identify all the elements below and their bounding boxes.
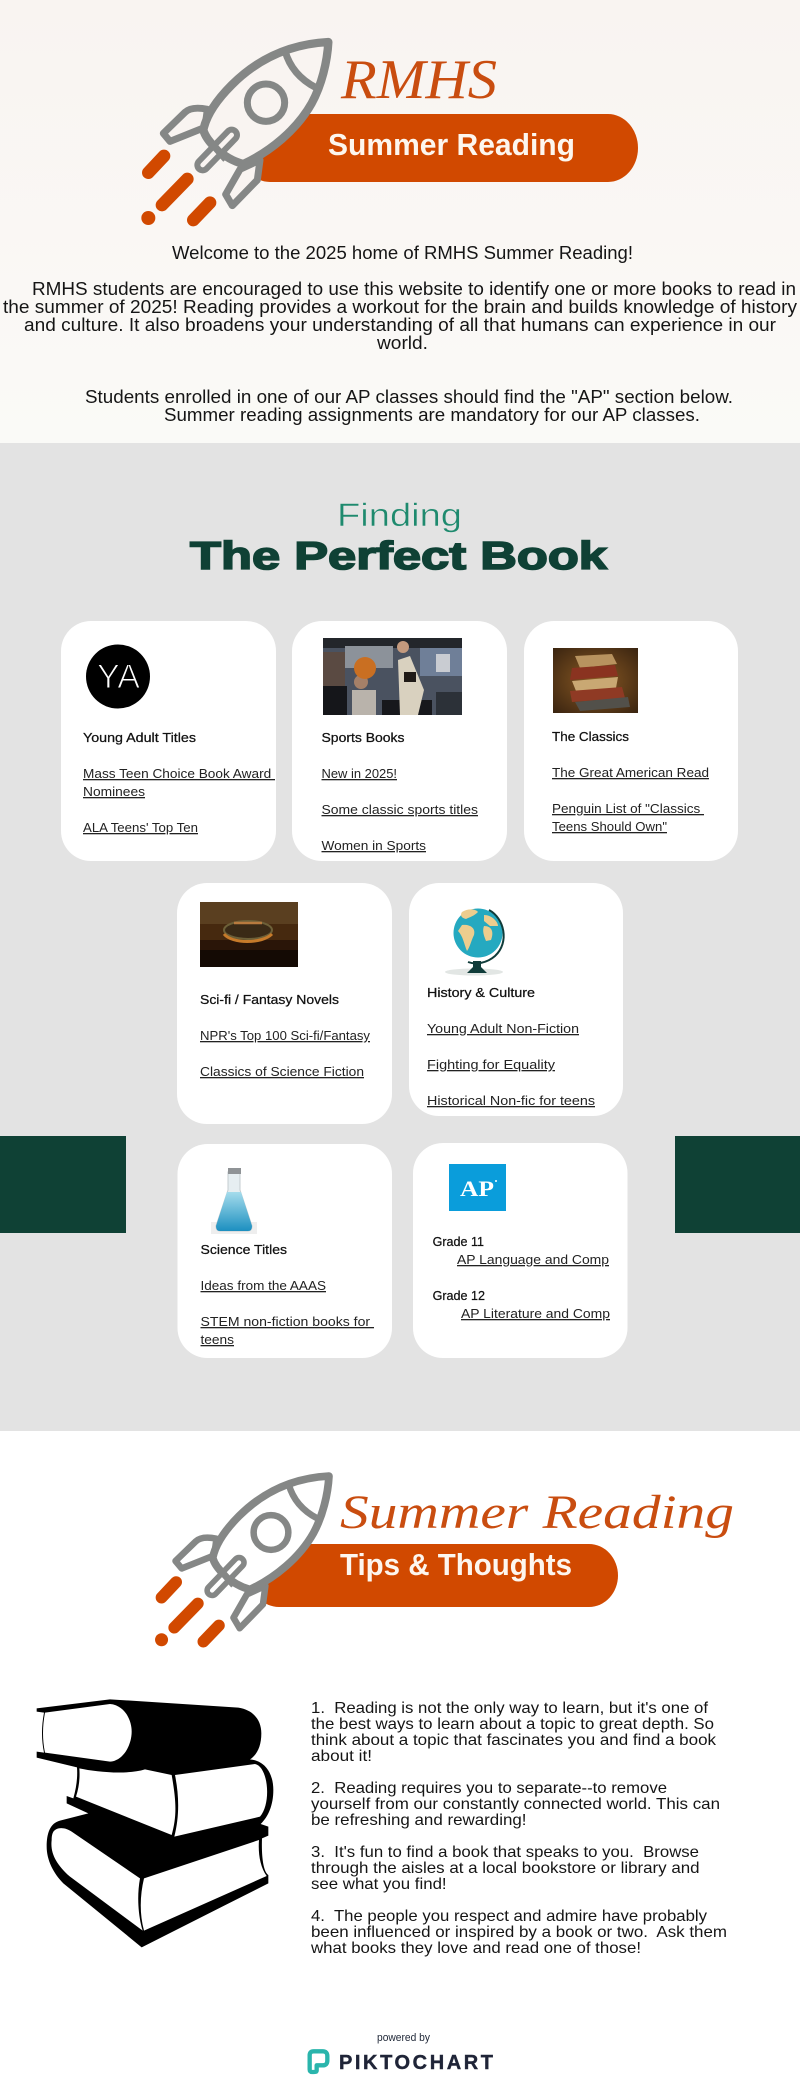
tip 2: 2. Reading requires you to separate--to remove (311, 1780, 667, 1797)
card: sports books (292, 621, 507, 861)
icon: AP logo: AP (460, 1176, 494, 1201)
decorative green band left (0, 1136, 126, 1233)
image: basketball player (323, 638, 462, 715)
card title: Young Adult Titles (83, 730, 197, 745)
panel: tips and thoughts (0, 1431, 800, 2094)
links: Fighting for Equality (427, 1057, 556, 1072)
icon: YA circle (86, 644, 150, 708)
text block: welcome introduction: the summer of 2025! Reading provides a workout for the brain and builds knowledge of history (3, 297, 797, 317)
card title: History & Culture (427, 985, 535, 1000)
tip 2: yourself from our constantly connected world. This can (311, 1796, 720, 1813)
card: sci-fi and fantasy (177, 883, 392, 1124)
powered by label: powered by (377, 2032, 430, 2044)
card title: Science Titles (200, 1242, 288, 1257)
subtitle: Summer Reading: Summer Reading (328, 127, 575, 162)
tip 1: the best ways to learn about a topic to great depth. So (311, 1716, 714, 1733)
links: Mass Teen Choice Book Award (83, 766, 275, 781)
links: STEM non-fiction books for (200, 1314, 374, 1329)
card: young adult titles (61, 621, 276, 861)
links: Some classic sports titles (322, 802, 479, 817)
Piktochart wordmark: PIKTOCHART (339, 2052, 493, 2074)
icon: rocket (155, 1476, 329, 1646)
text block: welcome introduction: Welcome to the 2025 home of RMHS Summer Reading! (172, 243, 633, 263)
tip 4: 4. The people you respect and admire have probably (311, 1908, 707, 1925)
grade 12 (433, 1288, 610, 1321)
card: history and culture (409, 883, 623, 1116)
icon: AP logo (449, 1164, 506, 1211)
tip 3: 3. It's fun to find a book that speaks to you. Browse (311, 1844, 699, 1861)
links (427, 1021, 596, 1108)
icon: globe (445, 908, 504, 976)
tip 4: been influenced or inspired by a book or two. Ask them (311, 1924, 727, 1941)
image: glowing ring (200, 902, 298, 967)
card title: Sports Books (322, 730, 405, 745)
heading: The Perfect Book: The Perfect Book (190, 535, 607, 578)
footer: powered by Piktochart (310, 2032, 493, 2074)
title: RMHS: RMHS (340, 49, 497, 111)
grade 12: AP Literature and Comp (461, 1306, 610, 1321)
text block: welcome introduction: RMHS students are encouraged to use this website to identify one or more books to read in (32, 279, 796, 299)
grade 11: Grade 11 (433, 1234, 484, 1249)
text block: welcome introduction: Summer reading assignments are mandatory for our AP classes. (164, 405, 700, 425)
links: Ideas from the AAAS (200, 1278, 326, 1293)
card: science titles (178, 1144, 392, 1358)
grade 12: Grade 12 (433, 1288, 485, 1303)
tip 3 (311, 1844, 700, 1893)
icon: Piktochart logo (310, 2051, 327, 2072)
links: New in 2025! (322, 766, 397, 781)
tip 1 (311, 1700, 717, 1765)
links: Women in Sports (322, 838, 427, 853)
tip 4: what books they love and read one of those! (310, 1940, 641, 1957)
tip 1: about it! (311, 1748, 372, 1765)
icon: YA circle: YA (97, 658, 140, 696)
links: ALA Teens' Top Ten (83, 820, 198, 835)
links: Young Adult Non-Fiction (427, 1021, 579, 1036)
image: flask (211, 1168, 257, 1234)
links: Classics of Science Fiction (200, 1064, 364, 1079)
text block: reading tips (310, 1700, 727, 1957)
tip 4 (310, 1908, 727, 1957)
links (200, 1278, 374, 1347)
decorative green band right (675, 1136, 800, 1233)
card title: Sci-fi / Fantasy Novels (200, 992, 340, 1007)
tip 3: see what you find! (311, 1876, 447, 1893)
panel: hero header (0, 0, 800, 443)
links (200, 1028, 370, 1079)
links (322, 766, 479, 853)
links: Teens Should Own" (552, 819, 667, 834)
tip 2: be refreshing and rewarding! (311, 1812, 526, 1829)
text block: welcome introduction: world. (376, 333, 428, 353)
tip 2 (311, 1780, 720, 1829)
tip 1: think about a topic that fascinates you and find a book (311, 1732, 717, 1749)
links (552, 765, 709, 834)
icon: rocket (141, 42, 328, 225)
subtitle: Tips & Thoughts: Tips & Thoughts (340, 1547, 572, 1582)
links: Penguin List of "Classics (552, 801, 704, 816)
links: teens (200, 1332, 235, 1347)
grade 11 (433, 1234, 609, 1267)
heading: Finding: Finding (337, 497, 462, 533)
links: Historical Non-fic for teens (427, 1093, 596, 1108)
panel: finding the perfect book (0, 443, 800, 1431)
tip 1: 1. Reading is not the only way to learn, but it's one of (311, 1700, 709, 1717)
card: the classics (524, 621, 738, 861)
links: Nominees (83, 784, 146, 799)
text block: welcome introduction: and culture. It also broadens your understanding of all that humans can experience in our (24, 315, 776, 335)
banner bar (240, 114, 638, 182)
card: AP classes (413, 1143, 628, 1358)
icon: book stack (37, 1699, 273, 1947)
image: old book stack (553, 648, 638, 713)
title: Summer Reading: Summer Reading (340, 1486, 734, 1539)
text block: welcome introduction (3, 243, 797, 425)
text block: welcome introduction: Students enrolled in one of our AP classes should find the "AP" section below. (85, 387, 733, 407)
banner bar (250, 1544, 618, 1607)
tip 3: through the aisles at a local bookstore or library and (311, 1860, 700, 1877)
links (83, 766, 275, 835)
grade 11: AP Language and Comp (457, 1252, 609, 1267)
links: The Great American Read (552, 765, 709, 780)
card title: The Classics (552, 729, 630, 744)
links: NPR's Top 100 Sci-fi/Fantasy (200, 1028, 370, 1043)
